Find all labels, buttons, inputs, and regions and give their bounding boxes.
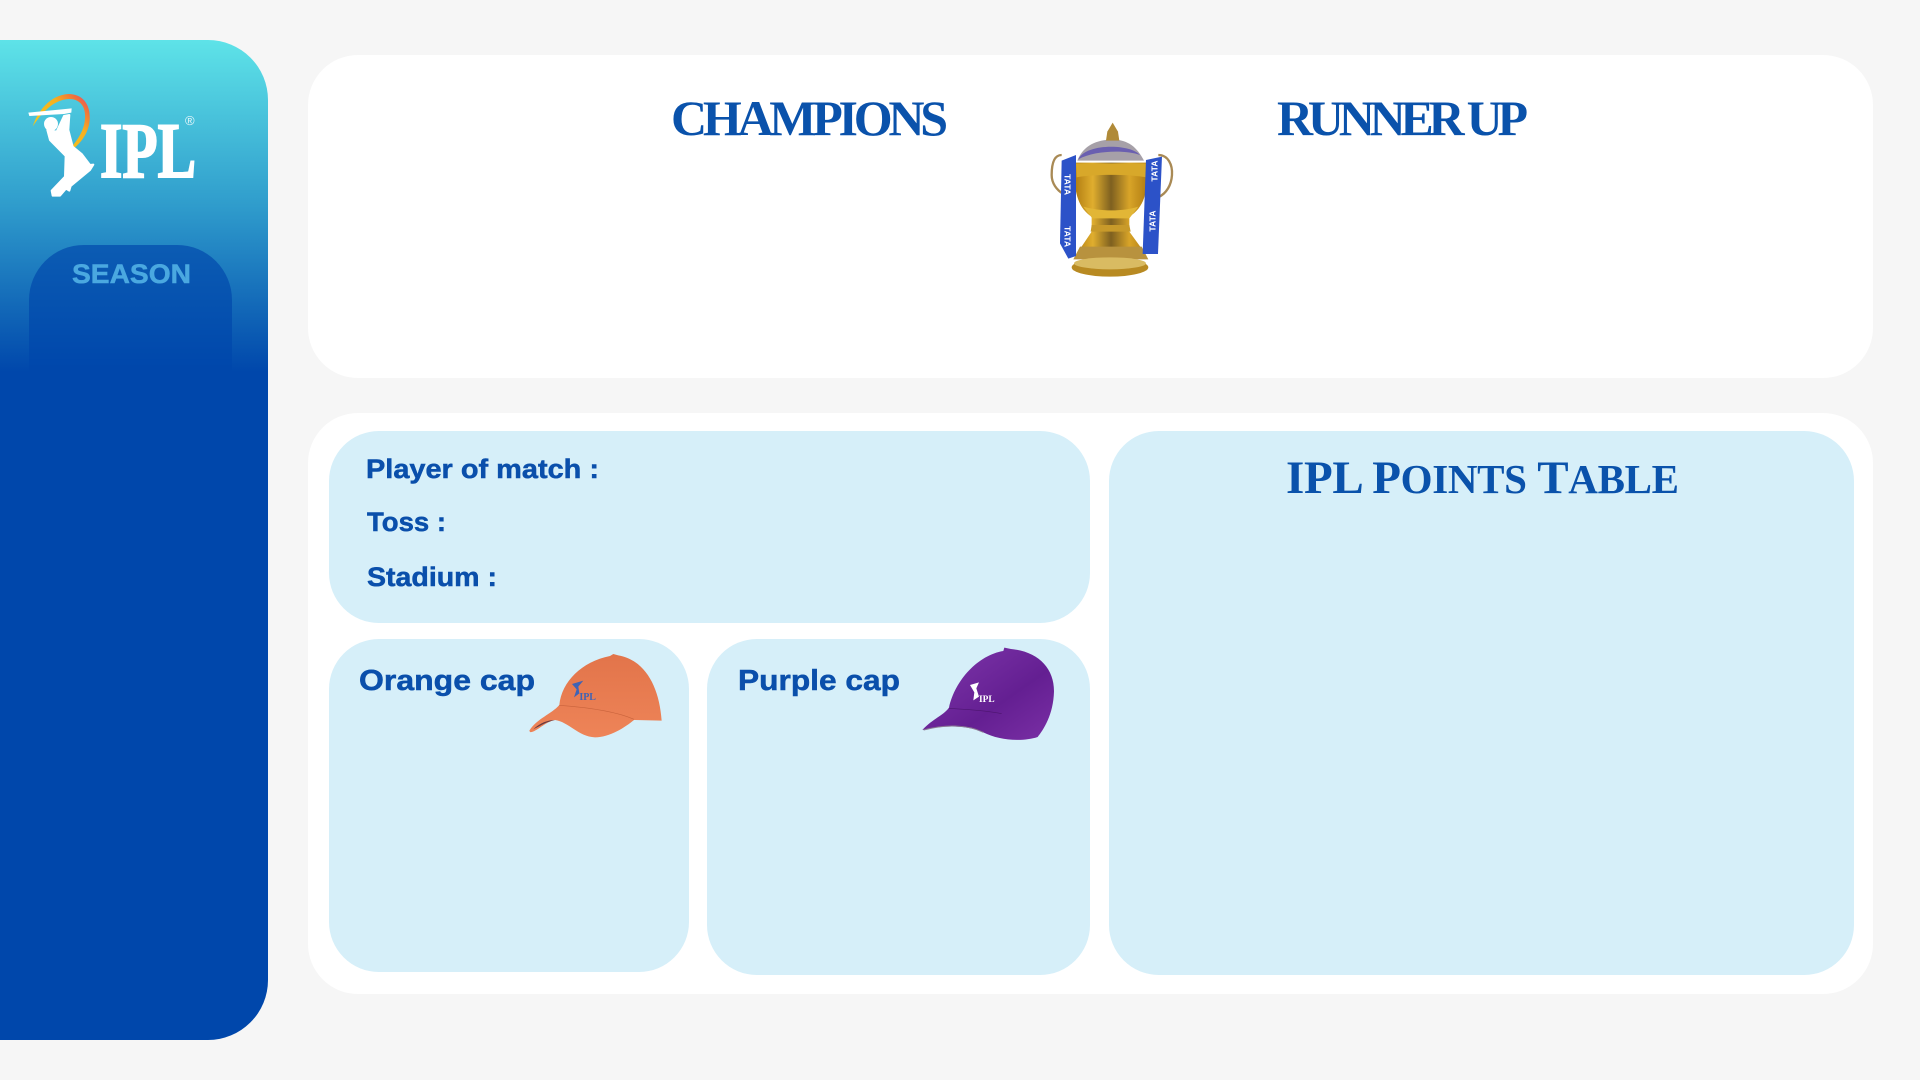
cap logo: IPL bbox=[579, 692, 596, 703]
ribbon text: TATA bbox=[1147, 210, 1157, 232]
logo wordmark: IPL bbox=[100, 107, 196, 194]
label: stadium: Stadium : bbox=[367, 562, 497, 592]
icon: IPL trophy bbox=[1052, 123, 1172, 277]
label: orange cap: Orange cap bbox=[359, 665, 535, 697]
ribbon text: TATA bbox=[1063, 174, 1073, 196]
logo batsman bbox=[28, 94, 93, 196]
panel: match details and points bbox=[308, 413, 1873, 994]
panel: final result bbox=[308, 55, 1873, 378]
panel: purple cap bbox=[707, 639, 1090, 975]
IPL logo bbox=[28, 94, 196, 196]
panel: match info bbox=[329, 431, 1090, 623]
label: purple cap: Purple cap bbox=[738, 665, 900, 697]
heading: points table: IPL Points Table bbox=[1286, 441, 1679, 506]
icon: purple cap bbox=[922, 648, 1054, 740]
label: player of match: Player of match : bbox=[366, 454, 599, 484]
registered mark: ® bbox=[185, 113, 195, 128]
panel: orange cap bbox=[329, 639, 689, 972]
panel: points table bbox=[1109, 431, 1854, 975]
heading: champions: CHAMPIONS bbox=[671, 90, 948, 146]
season label: SEASON bbox=[72, 259, 191, 289]
ribbon text: TATA bbox=[1149, 160, 1159, 182]
icon: orange cap bbox=[529, 654, 662, 737]
label: toss: Toss : bbox=[367, 507, 446, 537]
cap logo: IPL bbox=[979, 695, 995, 705]
heading: runner up: RUNNER UP bbox=[1277, 90, 1528, 146]
sidebar panel bbox=[0, 40, 268, 1040]
ribbon text: TATA bbox=[1063, 226, 1073, 248]
season selector panel bbox=[29, 245, 232, 375]
